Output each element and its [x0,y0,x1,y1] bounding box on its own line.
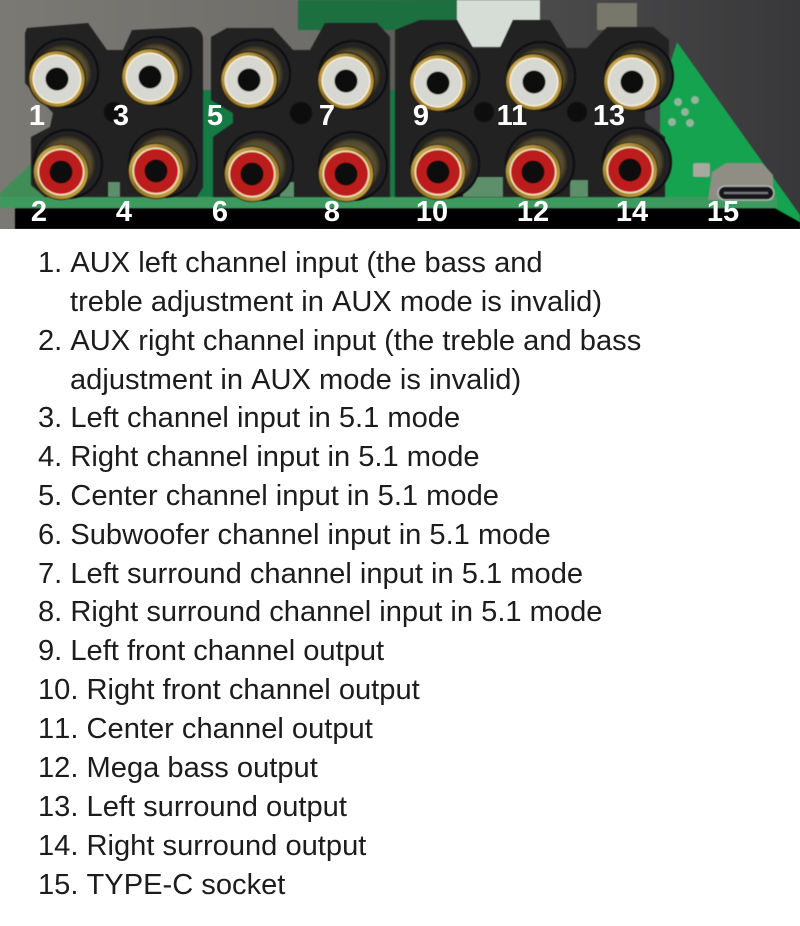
item 8: 8. Right surround channel input in 5.1 mode [38,596,602,628]
item 2 continuation: adjustment in AUX mode is invalid) [70,364,521,396]
socket number labels: 2 [31,196,47,228]
mounting holes [104,102,587,124]
socket housings [25,20,669,197]
item 7: 7. Left surround channel input in 5.1 mode [38,558,583,590]
solder pads [668,96,699,127]
item 15: 15. TYPE-C socket [38,869,285,901]
item 10: 10. Right front channel output [38,674,420,706]
item 1: 1. AUX left channel input (the bass and [38,247,543,279]
socket number labels: 13 [593,100,625,132]
socket number labels: 10 [416,196,448,228]
item 12: 12. Mega bass output [38,752,318,784]
red RCA sockets [33,127,672,202]
item 3: 3. Left channel input in 5.1 mode [38,402,460,434]
item 4: 4. Right channel input in 5.1 mode [38,441,480,473]
item 2: 2. AUX right channel input (the treble and bass [38,325,641,357]
background [0,0,800,229]
socket number labels: 14 [616,196,648,228]
socket number labels: 5 [207,100,223,132]
socket number labels: 11 [497,100,527,132]
socket number labels [29,100,739,228]
item 11: 11. Center channel output [38,713,373,745]
socket number labels: 6 [212,196,228,228]
photo: rear panel of the board with numbered RCA sockets [0,0,800,229]
item 9: 9. Left front channel output [38,635,384,667]
white RCA sockets [28,36,674,112]
numbered connector list [38,247,641,901]
item 13: 13. Left surround output [38,791,347,823]
socket number labels: 15 [707,196,739,228]
circuit board [0,0,800,229]
socket number labels: 8 [324,196,340,228]
socket number labels: 4 [116,196,132,228]
housing notches [108,177,588,197]
socket number labels: 3 [113,100,129,132]
item 14: 14. Right surround output [38,830,366,862]
socket number labels: 7 [319,100,335,132]
item 6: 6. Subwoofer channel input in 5.1 mode [38,519,551,551]
socket number labels: 12 [517,196,549,228]
socket number labels: 9 [413,100,429,132]
socket number labels: 1 [29,100,45,132]
icon: USB Type-C socket [693,163,774,200]
item 1 continuation: treble adjustment in AUX mode is invalid) [70,286,602,318]
item 5: 5. Center channel input in 5.1 mode [38,480,499,512]
